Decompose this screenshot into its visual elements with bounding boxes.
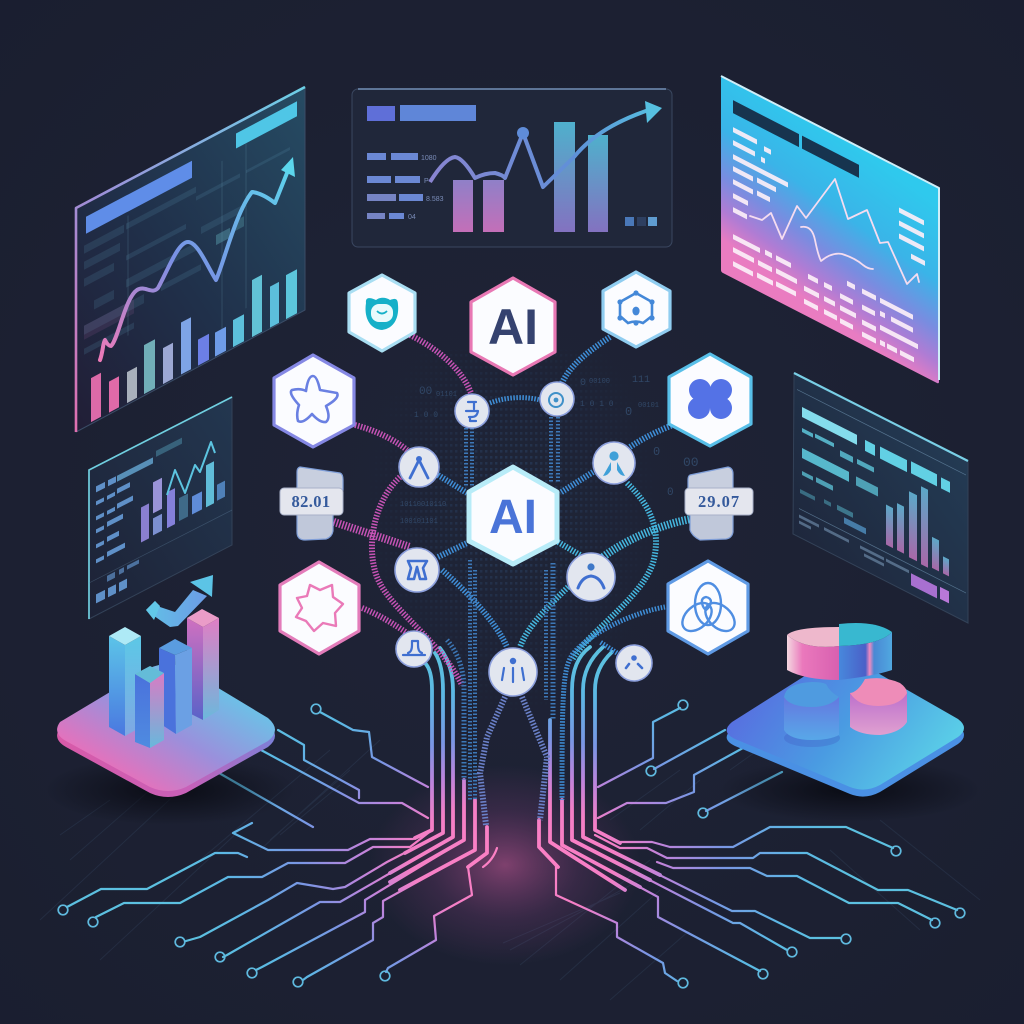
- list rows: P: [424, 178, 429, 185]
- hexagon: polygon nodes icon: [603, 272, 670, 347]
- dotted network connections: [328, 335, 698, 825]
- bar chart: [91, 256, 297, 422]
- bars: [453, 122, 657, 232]
- node: circle 7: [396, 631, 432, 667]
- binary data matrix behind network: [400, 366, 698, 656]
- binary data matrix behind network: 0: [580, 378, 586, 389]
- hexagon: interlocked rings icon: [668, 561, 748, 654]
- panel: flat chart, top centre: [352, 89, 672, 247]
- panel: bright gradient dashboard, top right: [721, 76, 939, 384]
- binary data matrix behind network: 0: [667, 487, 674, 499]
- terminal circles: [58, 700, 965, 988]
- hexagon: AI top: [471, 278, 555, 375]
- hexagon: star icon: [274, 355, 354, 447]
- icon: teal face: [366, 298, 398, 330]
- list rows: 1080: [421, 155, 437, 162]
- node: circle 1: [455, 394, 489, 428]
- hexagon: teal smiley icon: [349, 275, 415, 351]
- panel: small chart, left: [89, 397, 232, 619]
- 3D arrow: [146, 575, 213, 627]
- list rows: 8.583: [426, 196, 444, 203]
- binary data matrix behind network: 00: [683, 455, 699, 470]
- node: circle 3: [399, 447, 439, 487]
- left traces: [67, 712, 497, 980]
- line charts: [750, 179, 919, 284]
- trend line with arrow: [100, 157, 295, 360]
- node: circle 6: [567, 553, 615, 601]
- value tag left: [280, 467, 343, 540]
- value tag right: 29.07: [698, 492, 740, 511]
- pink central glow: [370, 765, 640, 965]
- 3D bars: [109, 609, 219, 748]
- platform: left with 3D bars: [45, 575, 295, 825]
- binary data matrix behind network: 111: [632, 375, 650, 386]
- text rows: [733, 122, 925, 369]
- binary data matrix behind network: 00101: [638, 402, 659, 410]
- binary data matrix behind network: 10110010110: [400, 501, 446, 509]
- icon: node ring: [617, 290, 655, 326]
- binary data matrix behind network: 00: [419, 386, 432, 398]
- value tag right: [685, 467, 753, 540]
- binary data matrix behind network: 100101101: [400, 518, 438, 526]
- right traces: [539, 708, 957, 981]
- binary data matrix behind network: 0: [653, 445, 660, 459]
- line with arrow: [430, 101, 662, 187]
- node: circle 2: [540, 382, 574, 416]
- panel: tilted line and bar chart, top left: [76, 87, 305, 432]
- list rows: 04: [408, 214, 416, 221]
- central hexagon: AI: [469, 467, 557, 564]
- hexagon: AI top: AI: [488, 299, 538, 355]
- binary data matrix behind network: 00100: [589, 378, 610, 386]
- binary data matrix behind network: 0: [625, 405, 632, 419]
- thick vertical bundle: [390, 647, 660, 890]
- binary data matrix behind network: 1 0 0: [414, 411, 438, 420]
- value tag left: 82.01: [291, 492, 331, 511]
- icon: burst outline: [296, 585, 343, 631]
- circuit traces: [58, 647, 965, 988]
- hexagon: clover icon: [669, 354, 751, 446]
- node: circle 4: [593, 442, 635, 484]
- faint circuit-board texture: [40, 720, 980, 1000]
- binary data matrix behind network: 01101: [436, 391, 457, 399]
- list rows: [367, 153, 444, 221]
- icon: three rings: [677, 583, 740, 637]
- cylinder segments: [784, 623, 907, 747]
- node: circle 9: [616, 645, 652, 681]
- node: circle 8: [489, 648, 537, 696]
- icon: four-lobe blob: [688, 379, 732, 419]
- bars: [886, 469, 949, 578]
- hexagon: pink burst icon: [280, 562, 359, 654]
- platform: right with pie cylinders: [720, 623, 980, 822]
- trend line: [167, 442, 215, 495]
- bars: [141, 446, 225, 542]
- node: circle 5: [395, 548, 439, 592]
- icon: outlined star: [291, 376, 338, 422]
- binary data matrix behind network: 1 0 1 0: [580, 400, 614, 409]
- central hexagon: AI: AI: [489, 491, 537, 544]
- panel: dark list and bars, right: [793, 373, 968, 623]
